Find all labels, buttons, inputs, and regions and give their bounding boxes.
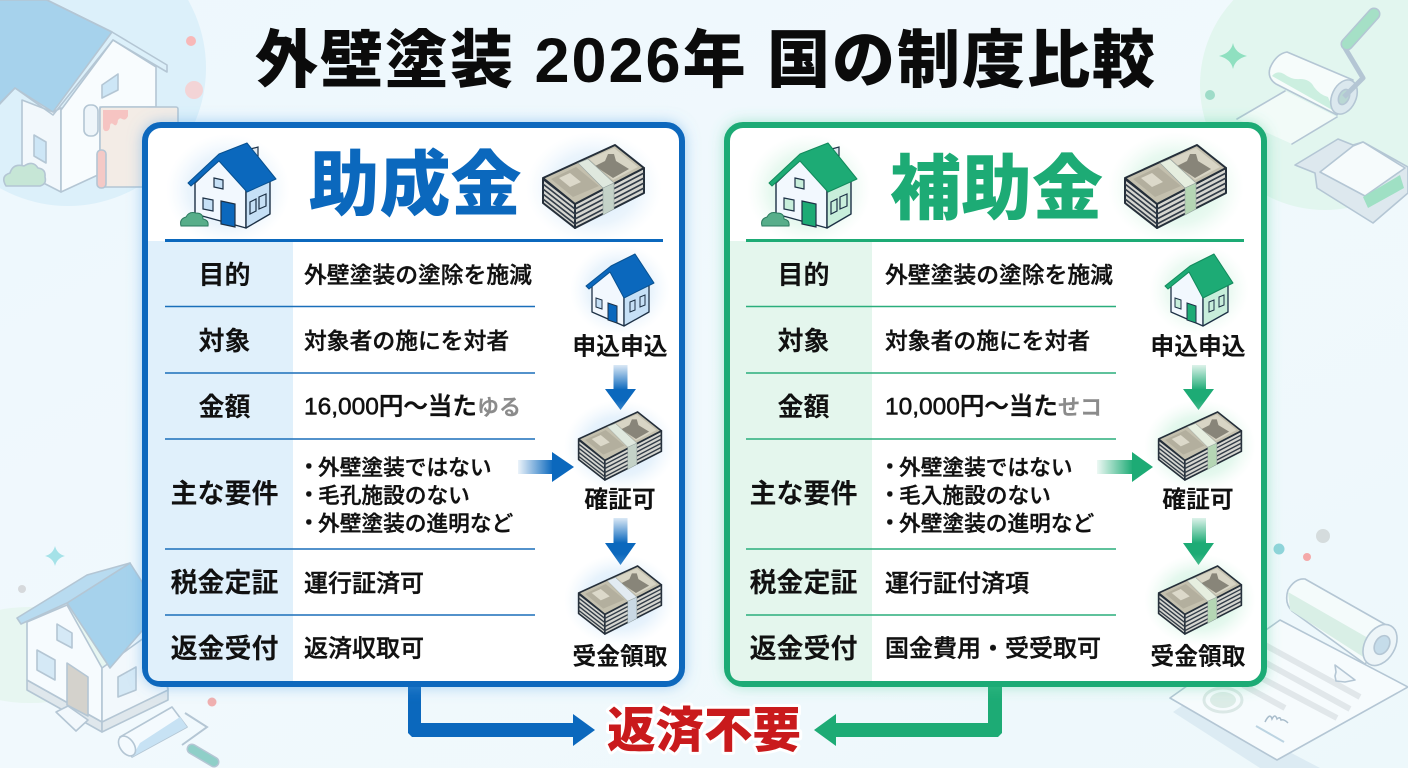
label column background	[730, 241, 872, 681]
icon: house	[747, 134, 871, 246]
icon: house	[1149, 244, 1249, 336]
background illustration: document and roll bottom right	[1170, 529, 1408, 768]
callout: 返済不要: 返済不要	[607, 704, 801, 758]
row: 主な要件: ・	[879, 482, 901, 508]
row: 主な要件: 主な要件	[750, 479, 858, 509]
background illustration: paint roller and tray top right	[1200, 0, 1408, 223]
background illustration: house top left	[0, 0, 206, 206]
arrow right	[518, 452, 574, 482]
icon: house	[570, 244, 670, 336]
icon: banknote stack	[1144, 400, 1256, 492]
panel frame	[727, 125, 1264, 684]
row: 主な要件: ・	[879, 454, 901, 480]
row: 主な要件: ・	[298, 454, 320, 480]
row: 目的: 外壁塗装の塗除を施減	[885, 262, 1113, 288]
title: 外壁塗装 2026年 国の制度比較	[255, 26, 1155, 96]
comparison table	[165, 260, 535, 664]
step: 確証可: 確証可	[584, 486, 656, 514]
row: 主な要件: 毛入施設のない	[899, 482, 1051, 508]
row: 金額: 金額	[198, 392, 251, 422]
row: 返金受付: 返金受付	[750, 634, 858, 664]
row: 主な要件: ・	[298, 510, 320, 536]
row: 主な要件: 外壁塗装ではない	[318, 454, 492, 480]
icon: banknote stack	[1144, 554, 1256, 646]
row: 目的: 目的	[198, 260, 251, 290]
arrow down	[1183, 365, 1214, 410]
step: 受金領取: 受金領取	[572, 644, 668, 670]
step: 確証可: 確証可	[1162, 486, 1234, 514]
process flow	[1097, 244, 1256, 670]
panel: 補助金	[727, 125, 1264, 684]
row: 主な要件	[750, 454, 1095, 536]
row: 税金定証: 運行証付済項	[885, 570, 1029, 598]
row: 金額	[777, 392, 1102, 422]
row: 目的: 目的	[777, 260, 830, 290]
row: 返金受付	[170, 634, 424, 664]
row: 目的: 外壁塗装の塗除を施減	[304, 262, 532, 288]
row: 税金定証: 税金定証	[170, 568, 278, 598]
arrow right	[1097, 452, 1153, 482]
row: 主な要件: 外壁塗装の進明など	[318, 510, 514, 536]
row: 金額: 16,000円〜当たゆる	[304, 392, 521, 420]
row: 対象	[777, 326, 1090, 356]
row: 主な要件: ・	[879, 510, 901, 536]
icon: banknote stack	[526, 132, 662, 244]
row: 対象	[198, 326, 509, 356]
row: 返金受付: 返金受付	[170, 634, 278, 664]
row: 目的	[198, 260, 532, 290]
row: 税金定証: 税金定証	[750, 568, 858, 598]
row: 対象: 対象	[198, 326, 251, 356]
connector arrow: 補助金 to 返済不要	[814, 686, 1002, 746]
heading: 助成金: 助成金	[308, 146, 522, 226]
row: 対象: 対象者の施にを対者	[304, 328, 509, 354]
step: 申込申込: 申込申込	[572, 334, 668, 360]
arrow down	[605, 365, 636, 410]
row: 返金受付: 返済収取可	[304, 636, 424, 662]
row: 金額	[198, 392, 521, 422]
row: 対象: 対象	[777, 326, 830, 356]
background illustration: house and roller bottom left	[0, 546, 216, 762]
row: 税金定証	[170, 568, 424, 598]
icon: banknote stack	[1108, 132, 1244, 244]
comparison table	[746, 260, 1116, 664]
arrow down	[605, 518, 636, 565]
panel: 助成金	[145, 125, 682, 684]
row: 主な要件: ・	[298, 482, 320, 508]
icon: house	[166, 134, 290, 246]
step: 申込申込: 申込申込	[1150, 334, 1246, 360]
row: 税金定証	[750, 568, 1029, 598]
row: 主な要件: 毛孔施設のない	[318, 482, 470, 508]
row: 主な要件: 外壁塗装の進明など	[899, 510, 1095, 536]
icon: banknote stack	[564, 554, 676, 646]
icon: banknote stack	[564, 400, 676, 492]
row: 主な要件	[170, 454, 514, 536]
row: 主な要件: 主な要件	[170, 479, 278, 509]
header rule	[746, 239, 1244, 242]
heading: 補助金: 補助金	[890, 150, 1103, 230]
row: 金額: 10,000円〜当たせコ	[885, 392, 1102, 420]
row: 返金受付: 国金費用・受受取可	[885, 636, 1101, 662]
label column background	[148, 241, 293, 681]
row: 目的	[777, 260, 1113, 290]
row: 対象: 対象者の施にを対者	[885, 328, 1090, 354]
row: 主な要件: 外壁塗装ではない	[899, 454, 1073, 480]
process flow	[518, 244, 676, 670]
row: 返金受付	[750, 634, 1101, 664]
header rule	[165, 239, 663, 242]
arrow down	[1183, 518, 1214, 565]
connector arrow: 助成金 to 返済不要	[408, 686, 595, 746]
step: 受金領取: 受金領取	[1150, 644, 1246, 670]
panel frame	[145, 125, 682, 684]
row: 金額: 金額	[777, 392, 830, 422]
row: 税金定証: 運行証済可	[304, 570, 424, 598]
